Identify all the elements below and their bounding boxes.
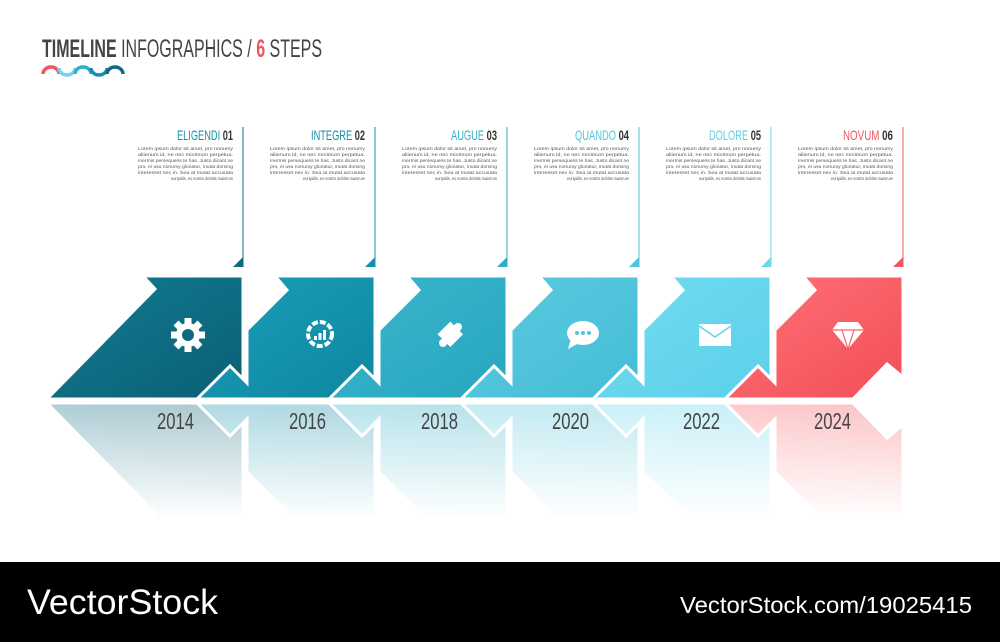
title: TIMELINE INFOGRAPHICS / 6 STEPS bbox=[42, 35, 322, 63]
step 6 text: NOVUM 06 bbox=[843, 127, 893, 143]
step 1 text: ELIGENDI 01 bbox=[177, 127, 233, 143]
reflection bbox=[50, 404, 902, 508]
arrow timeline bbox=[47, 276, 903, 399]
step texts bbox=[138, 127, 903, 267]
years: 2018 bbox=[421, 408, 458, 434]
icon: puzzle bbox=[438, 322, 463, 347]
icon: speech bubble bbox=[567, 321, 599, 349]
step 1 text bbox=[138, 127, 243, 267]
step 2 text: INTEGRE 02 bbox=[311, 127, 365, 143]
step 4 text bbox=[534, 127, 639, 267]
title waves bbox=[43, 67, 123, 75]
footer: VectorStock.com/19025415 bbox=[680, 592, 972, 618]
footer bbox=[0, 562, 1000, 642]
step 5 text: DOLORE 05 bbox=[709, 127, 761, 143]
icon: diamond bbox=[832, 322, 864, 349]
step 5 text bbox=[666, 127, 771, 267]
years bbox=[157, 408, 851, 434]
step 2 text bbox=[270, 127, 375, 267]
years: 2024 bbox=[814, 408, 851, 434]
years: 2020 bbox=[552, 408, 589, 434]
icon: envelope bbox=[699, 324, 731, 346]
icon: gear bbox=[171, 318, 205, 352]
years: 2014 bbox=[157, 408, 194, 434]
years: 2016 bbox=[289, 408, 326, 434]
icon: chart circle bbox=[308, 322, 332, 346]
step 6 text bbox=[798, 127, 903, 267]
step 3 text: AUGUE 03 bbox=[451, 127, 497, 143]
step 4 text: QUANDO 04 bbox=[575, 127, 629, 143]
step 3 text bbox=[402, 127, 507, 267]
footer: VectorStock bbox=[27, 583, 219, 622]
years: 2022 bbox=[683, 408, 720, 434]
